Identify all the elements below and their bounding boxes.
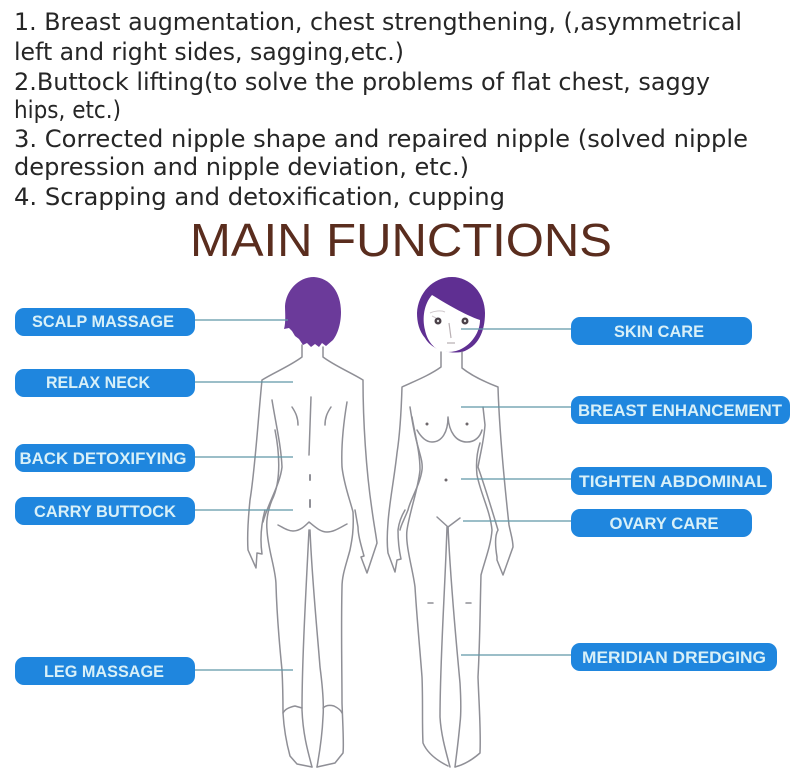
label: skin care (461, 317, 752, 345)
front face (424, 295, 480, 352)
front figure outline (387, 352, 513, 767)
label: meridian dredging: MERIDIAN DREDGING (582, 648, 766, 667)
top text block: list of benefits: 4. Scrapping and detoxification, cupping (14, 183, 505, 211)
facial features (430, 311, 468, 343)
label: relax neck: RELAX NECK (46, 373, 151, 392)
label: carry buttock: CARRY BUTTOCK (34, 502, 177, 521)
nipples and navel (426, 422, 468, 482)
label: ovary care: OVARY CARE (610, 514, 718, 533)
label: relax neck (15, 369, 293, 397)
label: back detoxifying: BACK DETOXIFYING (20, 449, 186, 468)
label: breast enhancement: BREAST ENHANCEMENT (578, 401, 783, 420)
top text block: list of benefits: depression and nipple deviation, etc.) (14, 153, 469, 181)
top text block: list of benefits: 1. Breast augmentation, chest strengthening, (,asymmetrical (14, 8, 742, 36)
label: meridian dredging (461, 643, 777, 671)
label: tighten abdominal: TIGHTEN ABDOMINAL (579, 472, 767, 491)
back view figure (248, 277, 377, 767)
front head hair (417, 277, 485, 352)
label: leg massage (15, 657, 293, 685)
top text block: list of benefits (14, 8, 748, 211)
label: back detoxifying (15, 444, 293, 472)
top text block: list of benefits: 3. Corrected nipple shape and repaired nipple (solved nipple (14, 125, 748, 153)
top text block: list of benefits: left and right sides, sagging,etc.) (14, 38, 404, 66)
label: tighten abdominal (461, 467, 772, 495)
label: ovary care (463, 509, 752, 537)
front view figure (387, 277, 513, 767)
label: scalp massage (15, 308, 288, 336)
label: breast enhancement (461, 396, 790, 424)
label: leg massage: LEG MASSAGE (44, 662, 164, 681)
back figure outline (248, 345, 377, 767)
title: MAIN FUNCTIONS (190, 214, 612, 266)
back head hair (284, 277, 341, 347)
top text block: list of benefits: 2.Buttock lifting(to solve the problems of flat chest, saggy (14, 68, 710, 96)
label: skin care: SKIN CARE (614, 322, 704, 341)
label: carry buttock (15, 497, 293, 525)
top text block: list of benefits: hips, etc.) (14, 96, 121, 124)
label: scalp massage: SCALP MASSAGE (32, 312, 174, 331)
